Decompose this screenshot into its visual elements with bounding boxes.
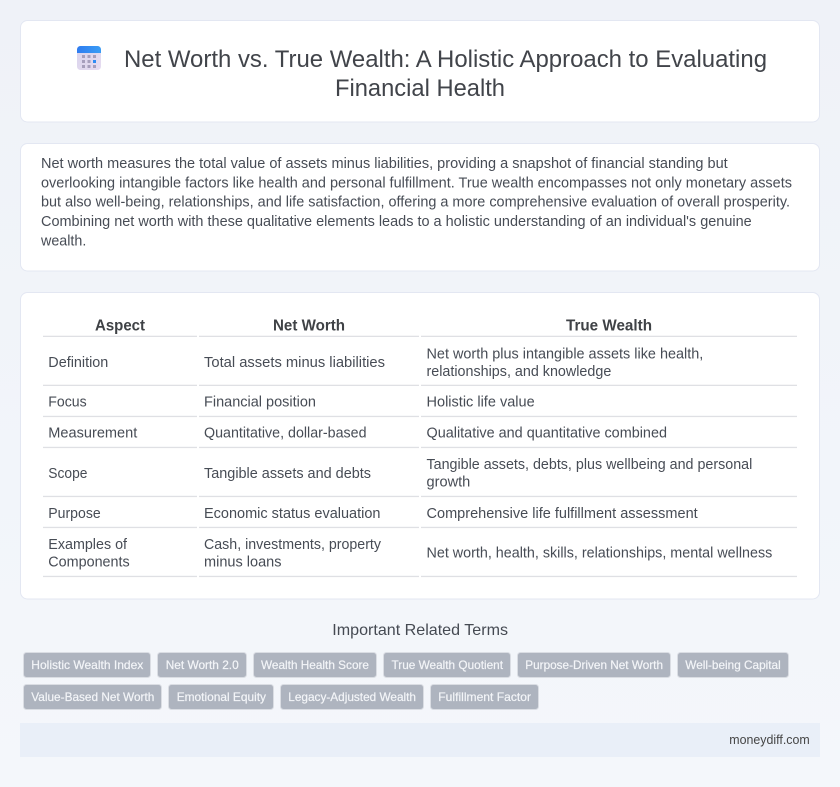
- tag: Legacy-Adjusted Wealth: [280, 684, 424, 710]
- row: purpose: Comprehensive life fulfillment assessment: [426, 506, 698, 522]
- row: examples of components: Cash, investments, property: [204, 537, 382, 553]
- row: examples of components: [48, 537, 772, 571]
- row: scope: Scope: [48, 466, 88, 482]
- row: examples of components: Components: [48, 555, 130, 571]
- text block: introduction paragraph: [40, 156, 792, 250]
- heading: important related terms: Important Related Terms: [332, 622, 508, 639]
- tag: Purpose-Driven Net Worth: Purpose-Driven Net Worth: [525, 658, 663, 672]
- row: definition: [48, 346, 703, 380]
- row: focus: Focus: [48, 395, 87, 411]
- tag: Fulfillment Factor: [430, 684, 538, 710]
- table header row: Aspect: [95, 318, 145, 334]
- tag: Holistic Wealth Index: Holistic Wealth Index: [31, 658, 143, 672]
- text block: introduction paragraph: but also well-being, relationships, and life satisfaction, offering a more comprehensive evaluation of overall prosperity.: [41, 195, 790, 211]
- tag: Value-Based Net Worth: Value-Based Net Worth: [31, 690, 154, 704]
- table header row: True Wealth: [566, 318, 652, 334]
- text block: introduction paragraph: wealth.: [40, 234, 86, 250]
- row: scope: growth: [426, 475, 470, 491]
- tag: Fulfillment Factor: Fulfillment Factor: [438, 690, 531, 704]
- tag: Well-being Capital: [678, 652, 788, 678]
- panel: introduction: [20, 144, 820, 271]
- tag: Value-Based Net Worth: [24, 684, 162, 710]
- text block: introduction paragraph: Net worth measures the total value of assets minus liabilities, providing a snapshot of financial standing but: [41, 156, 728, 172]
- row: measurement: Measurement: [48, 426, 137, 442]
- table header row: Net Worth: [273, 318, 345, 334]
- tag: Net Worth 2.0: Net Worth 2.0: [166, 658, 239, 672]
- row: definition: Net worth plus intangible assets like health,: [426, 346, 703, 362]
- row: examples of components: Net worth, health, skills, relationships, mental wellness: [426, 546, 772, 562]
- panel: comparison table: [20, 292, 820, 599]
- row: scope: Tangible assets and debts: [204, 466, 371, 482]
- row: measurement: Qualitative and quantitative combined: [426, 426, 667, 442]
- tag: Wealth Health Score: Wealth Health Score: [261, 658, 369, 672]
- row: measurement: Quantitative, dollar-based: [204, 426, 367, 442]
- tag: Wealth Health Score: [254, 652, 376, 678]
- text block: introduction paragraph: overlooking intangible factors like health and personal fulfillment. True wealth encompasses not only monetary assets: [41, 175, 792, 191]
- panel: header: [20, 20, 820, 122]
- row: purpose: [48, 506, 698, 522]
- row: scope: Tangible assets, debts, plus wellbeing and personal: [426, 457, 752, 473]
- row: definition: Definition: [48, 355, 108, 371]
- row: definition: Total assets minus liabilities: [204, 355, 385, 371]
- tag: Emotional Equity: [168, 684, 274, 710]
- row: focus: Holistic life value: [426, 395, 535, 411]
- row: purpose: Economic status evaluation: [204, 506, 381, 522]
- icon: calendar: [77, 46, 101, 70]
- tags: related terms: [24, 652, 788, 710]
- tag: Net Worth 2.0: [158, 652, 246, 678]
- text block: introduction paragraph: Combining net worth with these qualitative elements leads to a holistic understanding of an individual's genuine: [41, 214, 752, 230]
- row: scope: [48, 457, 752, 491]
- row: measurement: [48, 426, 667, 442]
- row: purpose: Purpose: [48, 506, 101, 522]
- title: Financial Health: [335, 75, 505, 102]
- row: focus: Financial position: [204, 395, 316, 411]
- row: examples of components: minus loans: [204, 555, 282, 571]
- row: definition: relationships, and knowledge: [426, 364, 611, 380]
- title: [124, 46, 767, 102]
- tag: Holistic Wealth Index: [24, 652, 150, 678]
- row: focus: [48, 395, 535, 411]
- table header row: [95, 318, 652, 334]
- footer: moneydiff.com: [729, 733, 810, 747]
- title: Net Worth vs. True Wealth: A Holistic Approach to Evaluating: [124, 46, 767, 73]
- tag: Emotional Equity: Emotional Equity: [177, 690, 266, 704]
- tag: Well-being Capital: Well-being Capital: [685, 658, 781, 672]
- tag: True Wealth Quotient: True Wealth Quotient: [392, 658, 504, 672]
- footer: [20, 723, 820, 757]
- tag: Purpose-Driven Net Worth: [518, 652, 670, 678]
- tag: Legacy-Adjusted Wealth: Legacy-Adjusted Wealth: [288, 690, 416, 704]
- tag: True Wealth Quotient: [384, 652, 510, 678]
- row: examples of components: Examples of: [48, 537, 127, 553]
